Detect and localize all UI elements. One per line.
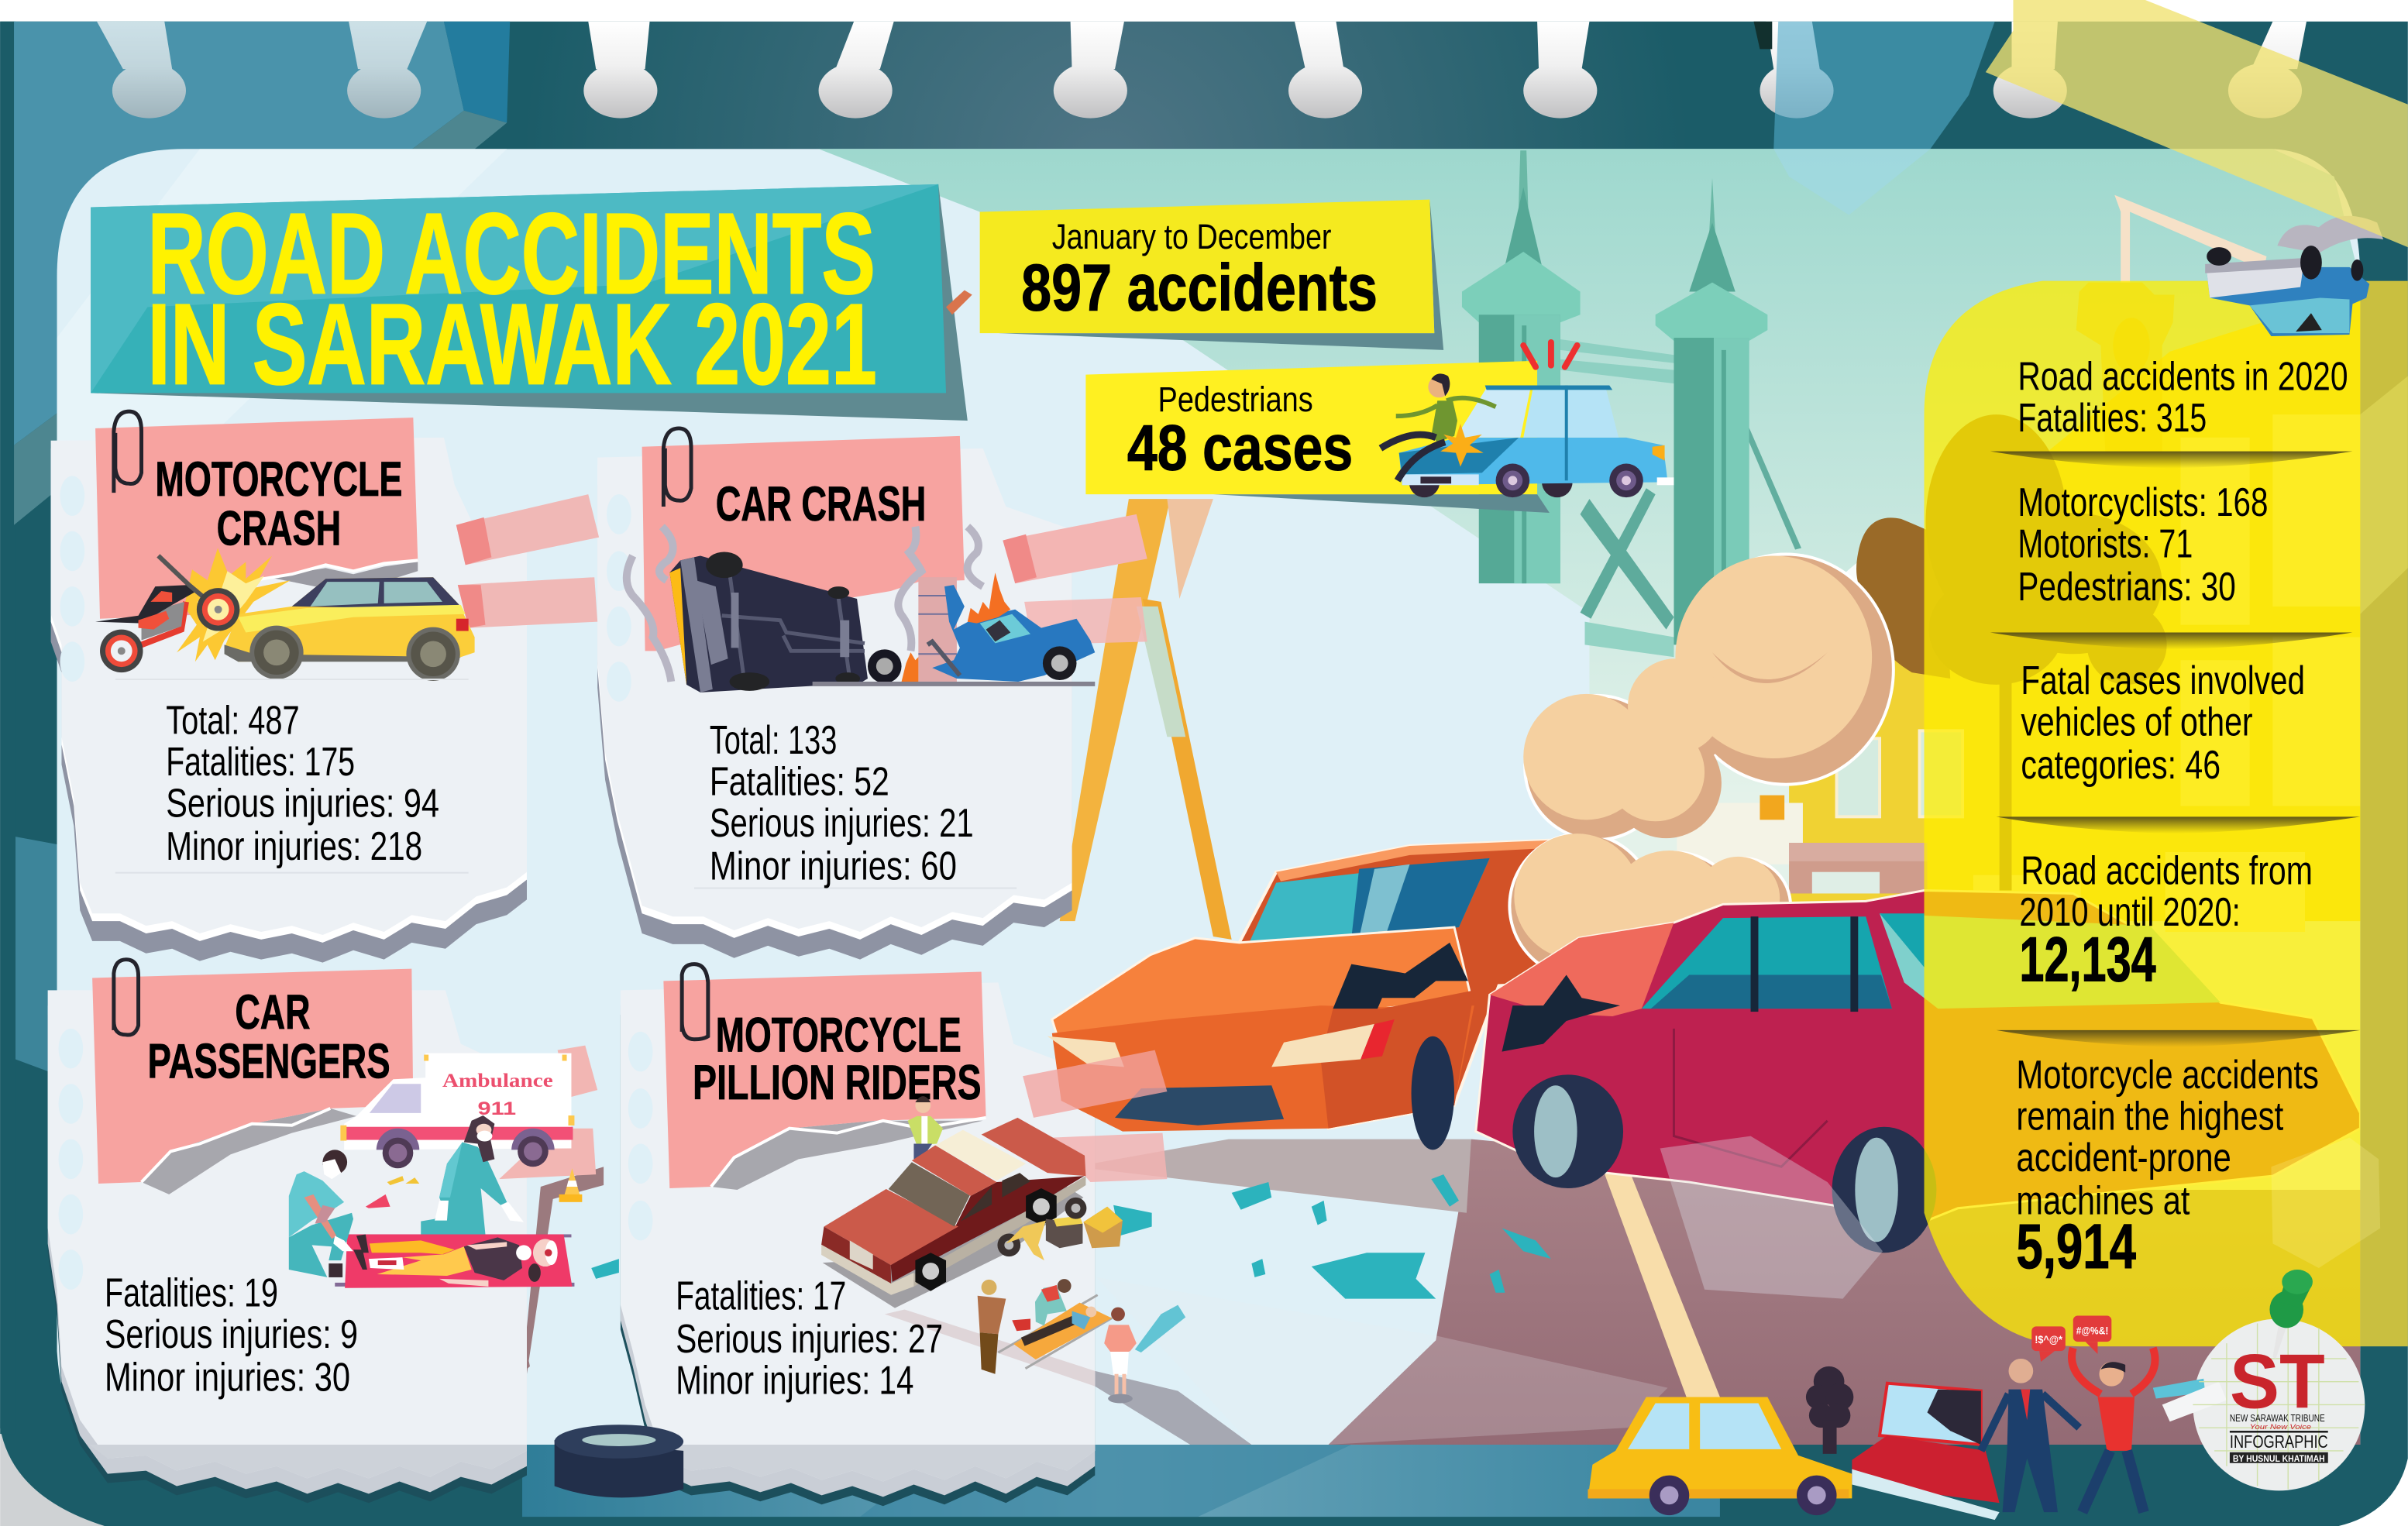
- tape strips: [456, 494, 1147, 1179]
- label: total accidents: [946, 200, 1443, 350]
- panel text: motorcycle accidents: 5,914: [2016, 1212, 2136, 1282]
- pink note: motorcycle crash heading: MOTORCYCLE: [155, 452, 402, 507]
- panel text: other vehicles: [2021, 658, 2305, 787]
- panel text: motorcycle accidents: machines at: [2016, 1178, 2190, 1223]
- stats: pillion riders: Fatalities: 17: [676, 1273, 846, 1318]
- torn note: motorcycle pillion riders: [621, 982, 1095, 1506]
- illustration: car hitting pedestrian: [1381, 342, 1674, 497]
- pink note: car passengers heading: [92, 960, 413, 1194]
- translucent glass on panel: [2271, 1138, 2380, 1268]
- smoke cloud: [1508, 552, 1895, 992]
- stats: motorcycle crash: [166, 697, 439, 868]
- orange tower strips: [1060, 499, 1232, 940]
- label: total accidents: January to December: [1052, 217, 1331, 256]
- arch behind flipped car: [2114, 195, 2266, 283]
- label: total accidents: 897 accidents: [1021, 251, 1378, 325]
- panel text: 2010 to 2020 total: Road accidents from: [2021, 848, 2313, 893]
- pink note: motorcycle crash heading: CRASH: [217, 502, 341, 556]
- logo: New Sarawak Tribune infographic: NEW SARAWAK TRIBUNE: [2230, 1412, 2325, 1424]
- illustration: overturned car and burning blue car: [627, 527, 1095, 693]
- panel text: 2020 road accidents: [2018, 353, 2348, 440]
- title banner: IN SARAWAK 2021: [147, 280, 877, 408]
- speech bubbles: [2031, 1315, 2111, 1362]
- torn note: motorcycle crash: [51, 438, 527, 963]
- stats: car crash: Total: 133: [710, 717, 837, 762]
- tire: [555, 1425, 683, 1497]
- panel text: other vehicles: categories: 46: [2021, 742, 2221, 787]
- panel text: road user fatalities: Motorists: 71: [2018, 521, 2193, 565]
- light shaft on page: [57, 149, 507, 552]
- illustration: yellow taxi: [1588, 1397, 1852, 1515]
- illustration: black smoke: [1806, 1366, 1853, 1454]
- stats: pillion riders: Serious injuries: 27: [676, 1316, 943, 1361]
- panel text: 2010 to 2020 total: 12,134: [2019, 924, 2156, 995]
- illustration: red damaged car: [1852, 1383, 2000, 1520]
- stats: car passengers: Fatalities: 19: [105, 1270, 278, 1315]
- pink note: motorcycle pillion riders heading: MOTORCYCLE: [716, 1009, 961, 1063]
- tape top right: [1986, 0, 2408, 247]
- panel text: motorcycle accidents: accident-prone: [2016, 1135, 2231, 1180]
- label: pedestrian cases: Pedestrians: [1158, 380, 1313, 419]
- panel text: other vehicles: vehicles of other: [2021, 699, 2253, 744]
- stats: motorcycle crash: Minor injuries: 218: [166, 823, 422, 868]
- stats: motorcycle crash: Total: 487: [166, 697, 300, 742]
- pink note: car crash heading: [642, 428, 965, 651]
- stats: car passengers: [105, 1270, 358, 1400]
- label: pedestrian cases: 48 cases: [1127, 411, 1353, 483]
- stats: pillion riders: [676, 1273, 943, 1403]
- illustration: ambulance and paramedics: Ambulance: [442, 1069, 553, 1091]
- title banner: [91, 184, 968, 421]
- panel text: 2010 to 2020 total: [2019, 848, 2313, 995]
- pink note: car crash heading: CAR CRASH: [716, 477, 926, 531]
- speech bubbles: #@%&!: [2076, 1324, 2108, 1336]
- illustration: arguing drivers: [1981, 1348, 2155, 1512]
- icon: green pin: [2269, 1270, 2313, 1359]
- stats: car crash: [710, 717, 974, 888]
- bridge: [1462, 150, 1801, 657]
- panel text: 2010 to 2020 total: 2010 until 2020:: [2019, 889, 2241, 934]
- logo: New Sarawak Tribune infographic: [2153, 1318, 2365, 1490]
- logo: New Sarawak Tribune infographic: INFOGRAPHIC: [2230, 1431, 2328, 1452]
- stats: car crash: Serious injuries: 21: [710, 800, 974, 845]
- stats: pillion riders: Minor injuries: 14: [676, 1358, 913, 1403]
- binder holes: [97, 22, 2307, 119]
- pink note: car passengers heading: CAR: [235, 985, 311, 1040]
- yellow stats panel: [1925, 281, 2360, 1346]
- illustration: red sedan and motorcycle accident: [821, 1096, 1137, 1403]
- bottom strip: [522, 1445, 1720, 1517]
- stats: car crash: Minor injuries: 60: [710, 844, 957, 888]
- sky background: [819, 149, 2360, 1351]
- logo: New Sarawak Tribune infographic: Your New Voice: [2250, 1423, 2311, 1431]
- flipped blue car: [2205, 216, 2383, 336]
- buildings: [1677, 292, 2360, 932]
- panel text: motorcycle accidents: Motorcycle accidents: [2016, 1052, 2319, 1097]
- logo: New Sarawak Tribune infographic: BY HUSNUL KHATIMAH: [2233, 1453, 2325, 1464]
- stats: car passengers: Minor injuries: 30: [105, 1355, 350, 1400]
- teal debris: [591, 1174, 1551, 1352]
- pink note: motorcycle pillion riders heading: [663, 964, 986, 1190]
- glass shard top right: [1773, 22, 1995, 215]
- pink note: car passengers heading: PASSENGERS: [147, 1034, 390, 1088]
- illustration: ambulance and paramedics: [289, 1053, 582, 1288]
- panel text: motorcycle accidents: remain the highest: [2016, 1094, 2283, 1139]
- orange crashed car: [1023, 840, 1562, 1182]
- pink note: motorcycle crash heading: [95, 411, 418, 619]
- stats: motorcycle crash: Fatalities: 175: [166, 739, 355, 784]
- title banner: ROAD ACCIDENTS: [147, 190, 875, 318]
- speech bubbles: !$^@*: [2035, 1333, 2062, 1346]
- torn note: car crash: [597, 449, 1072, 960]
- stats: car crash: Fatalities: 52: [710, 759, 889, 804]
- glass shards on frame: [14, 22, 510, 1074]
- tree: [1856, 414, 2167, 890]
- panel text: road user fatalities: [2018, 479, 2268, 609]
- road: [1075, 1139, 2360, 1445]
- logo: New Sarawak Tribune infographic: ST: [2230, 1338, 2325, 1424]
- illustration: motorcycle and yellow car: [95, 548, 475, 681]
- panel text: other vehicles: Fatal cases involved: [2021, 658, 2305, 703]
- olive right band: [2360, 281, 2408, 1346]
- stats: motorcycle crash: Serious injuries: 94: [166, 780, 439, 825]
- illustration: ambulance and paramedics: 911: [478, 1098, 516, 1119]
- traffic light under panel: [2076, 283, 2175, 453]
- stats: car passengers: Serious injuries: 9: [105, 1311, 358, 1356]
- label: pedestrian cases: [1085, 361, 1550, 513]
- panel text: 2020 road accidents: Fatalities: 315: [2018, 395, 2207, 440]
- pink note: motorcycle pillion riders heading: PILLION RIDERS: [693, 1056, 982, 1110]
- torn note: car passengers: [48, 990, 527, 1503]
- panel text: motorcycle accidents: [2016, 1052, 2319, 1282]
- panel text: road user fatalities: Motorcyclists: 168: [2018, 479, 2268, 524]
- red crashed car: [1476, 890, 2360, 1299]
- floor cracks: [422, 1163, 738, 1451]
- panel text: road user fatalities: Pedestrians: 30: [2018, 564, 2236, 609]
- dividers: [1990, 452, 2360, 1047]
